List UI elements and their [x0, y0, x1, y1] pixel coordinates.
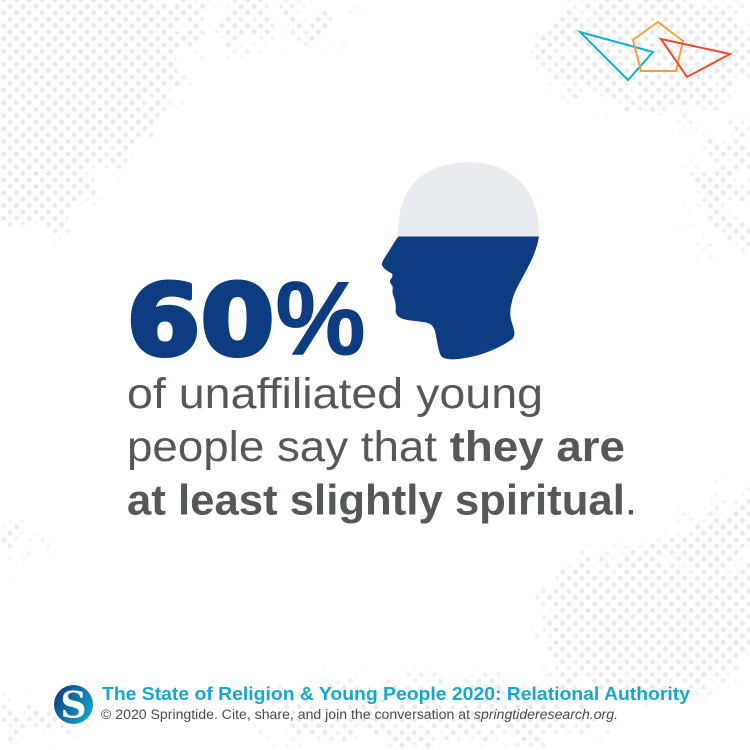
- icon: Springtide S logo: [54, 684, 93, 726]
- line 1: of unaffiliated young: [127, 370, 543, 418]
- footer title: The State of Religion & Young People 2020: Relational Authority: [102, 684, 690, 704]
- icon: Springtide S logo: S: [60, 684, 86, 726]
- line 3: at least slightly spiritual.: [127, 476, 637, 524]
- icon: overlapping geometric outlines: [580, 22, 730, 80]
- percent sign: %: [276, 261, 366, 377]
- statistic: 60%: [127, 261, 366, 377]
- icon: orange pentagon: [633, 22, 683, 71]
- icon: blue triangle: [580, 32, 653, 80]
- icon: red triangle: [661, 39, 730, 77]
- icon: head silhouette 60 percent filled: [382, 162, 539, 359]
- line 2: people say that they are: [127, 423, 625, 471]
- digit 0: 0: [201, 264, 274, 377]
- head top, unfilled part: [398, 162, 539, 237]
- digit 6: 6: [127, 264, 200, 377]
- footer credit line: © 2020 Springtide. Cite, share, and join the conversation at springtideresearch.org.: [101, 707, 618, 722]
- head bottom, filled part: [382, 236, 539, 359]
- text block: statement: [127, 370, 637, 524]
